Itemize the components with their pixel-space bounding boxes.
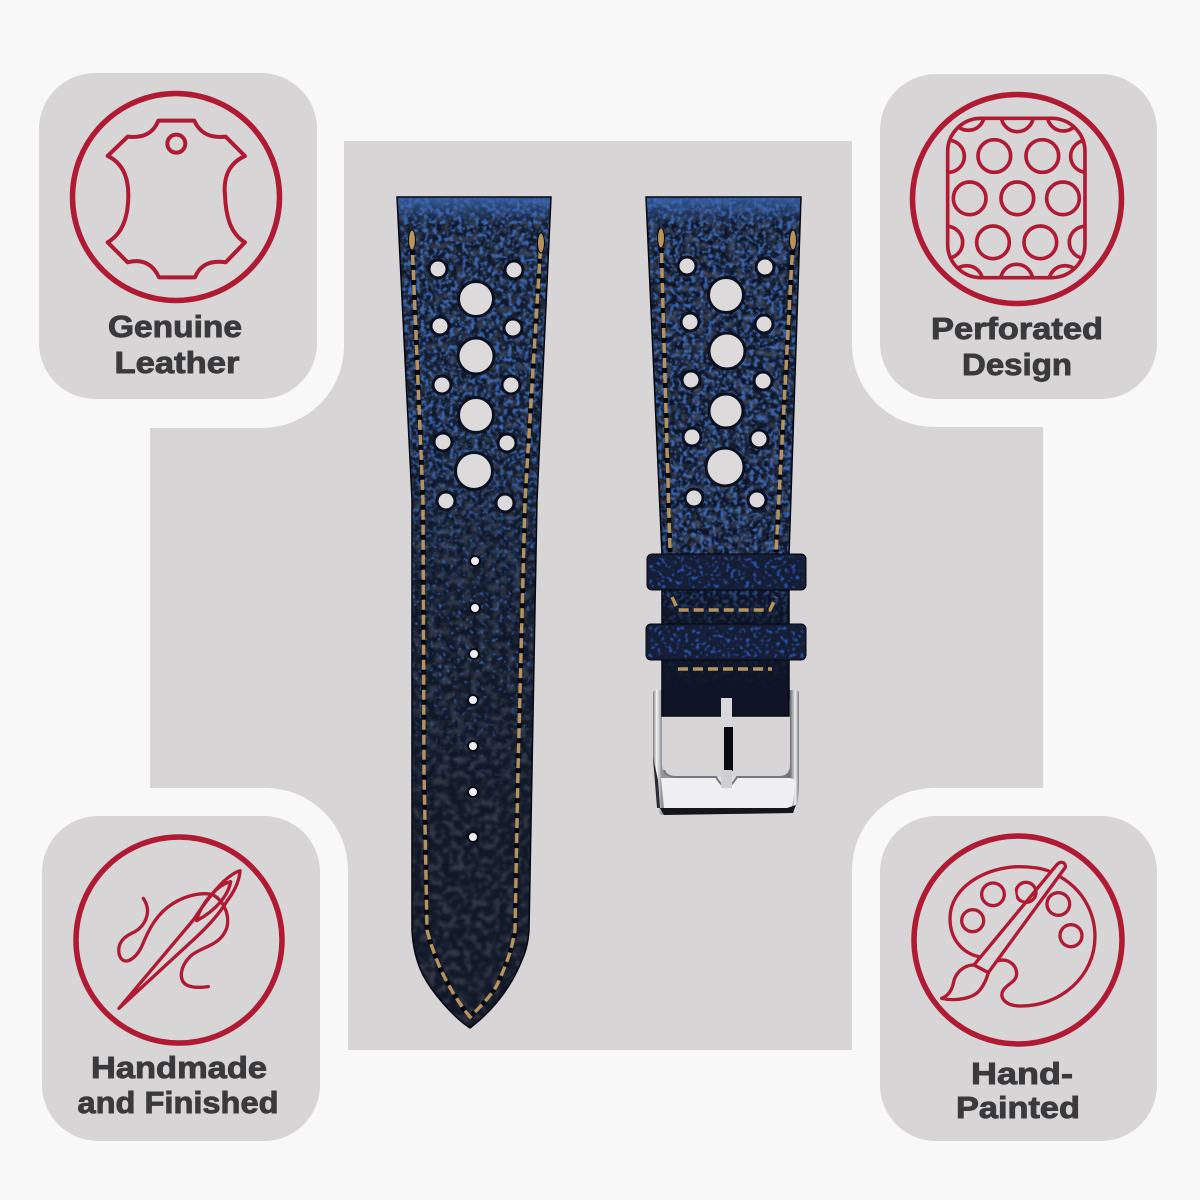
label: handmade and finished: Handmade bbox=[91, 1050, 267, 1085]
halo: bottom left bbox=[0, 788, 348, 1200]
panel: handmade and finished bbox=[42, 816, 320, 1141]
panel: hand-painted bbox=[880, 816, 1157, 1141]
label: genuine leather: Leather bbox=[114, 345, 240, 380]
label: hand-painted: Hand- bbox=[971, 1056, 1073, 1091]
icon: perforated pad in circle bbox=[912, 94, 1122, 304]
stitching: long strap bbox=[408, 230, 544, 1017]
icon: needle and thread in circle bbox=[76, 837, 282, 1043]
label: perforated design: Design bbox=[962, 347, 1072, 382]
stitching: buckle strap bbox=[658, 228, 796, 669]
label: genuine leather: Genuine bbox=[108, 309, 242, 344]
halo: top right bbox=[852, 0, 1200, 427]
panel: perforated design bbox=[880, 74, 1157, 399]
keeper loop: upper bbox=[647, 554, 806, 590]
icon: leather hide in circle bbox=[72, 94, 280, 300]
label: hand-painted: Painted bbox=[956, 1090, 1080, 1125]
buckle left shadow bbox=[653, 757, 660, 808]
keeper loop: lower bbox=[646, 624, 806, 660]
perforations: long strap bbox=[429, 260, 523, 842]
perforations: buckle strap bbox=[678, 257, 774, 509]
buckle pin bbox=[721, 698, 733, 788]
central grey cross panel bbox=[150, 141, 1043, 1050]
buckle inner edge line bbox=[664, 770, 790, 787]
label: perforated design: Perforated bbox=[931, 311, 1103, 346]
long strap piece bbox=[390, 190, 560, 1035]
icon: palette and brush in circle bbox=[914, 836, 1122, 1044]
metal buckle frame bbox=[653, 690, 799, 815]
halo: bottom right bbox=[852, 788, 1200, 1200]
halo: top left bbox=[0, 0, 344, 428]
label: handmade and finished: and Finished bbox=[78, 1085, 278, 1120]
buckle shadow edge bbox=[660, 805, 796, 815]
buckle strap piece bbox=[640, 190, 810, 788]
buckle lower bar bbox=[661, 778, 796, 808]
panel: genuine leather bbox=[39, 73, 317, 399]
